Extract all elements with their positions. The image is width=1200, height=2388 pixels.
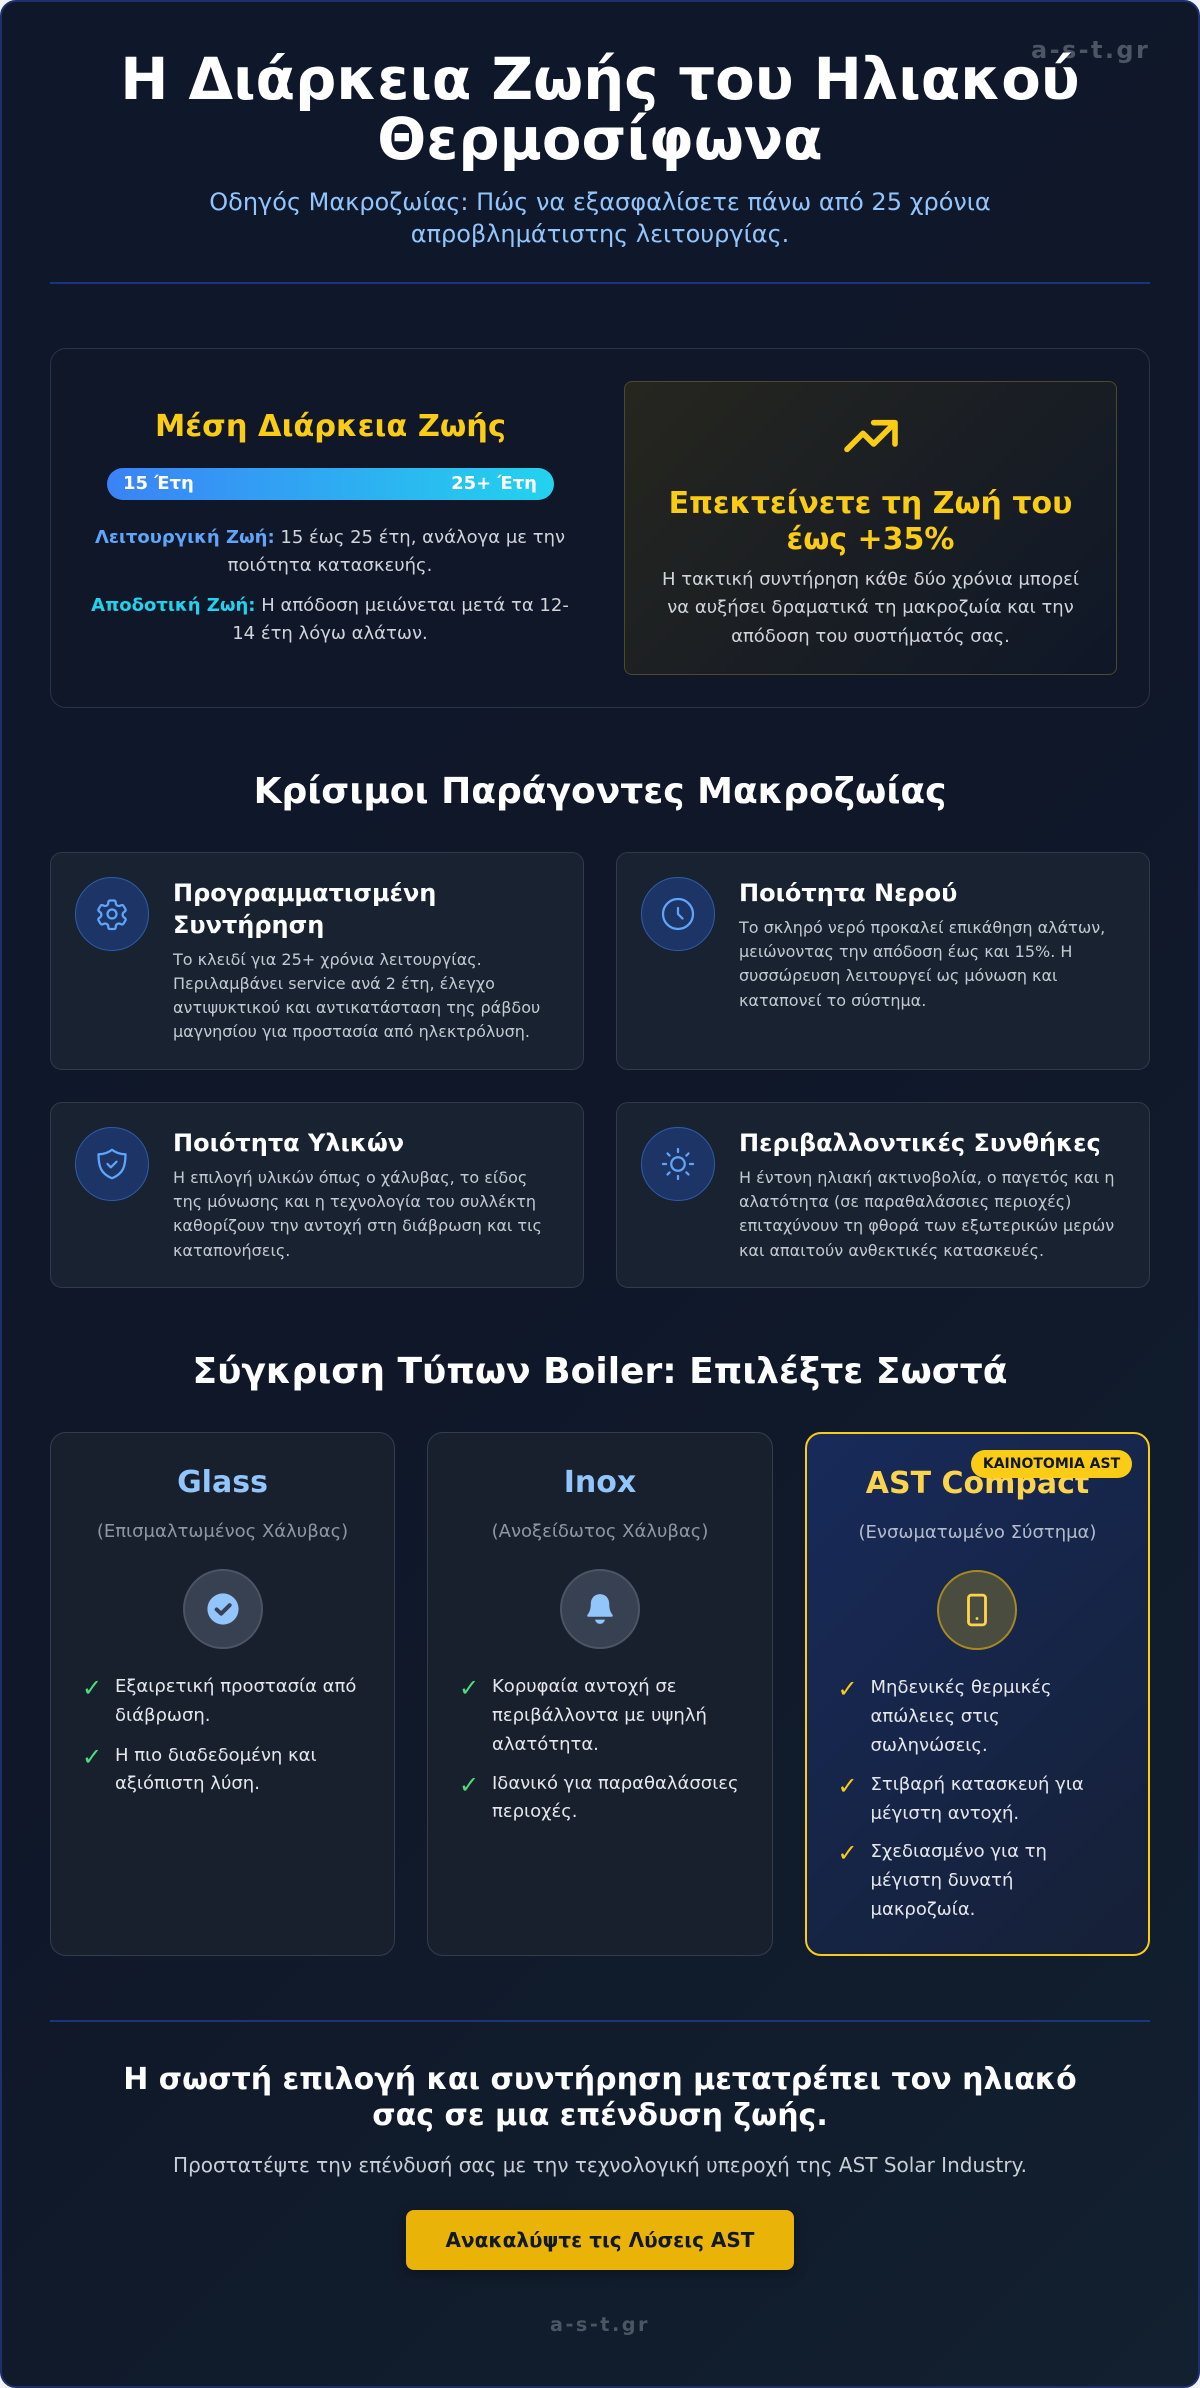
heading: boiler comparison: Σύγκριση Τύπων Boiler: Επιλέξτε Σωστά (192, 1351, 1008, 1392)
panel: AST Compact: ✓ (838, 1772, 858, 1800)
heading: Περιβαλλοντικές Συνθήκες (739, 1129, 1101, 1157)
icon: clock (641, 877, 715, 951)
heading: critical factors: Κρίσιμοι Παράγοντες Μακροζωίας (254, 771, 946, 812)
text: regular maintenance: Η τακτική συντήρηση κάθε δύο χρόνια μπορεί (662, 568, 1079, 590)
panel: water quality (616, 852, 1150, 1070)
text: efficient life: 14 έτη λόγω αλάτων. (232, 623, 428, 644)
description: αντιψυκτικού και αντικατάσταση της ράβδου (173, 998, 540, 1017)
text: operational life: ποιότητα κατασκευής. (228, 555, 432, 576)
heading: Προγραμματισμένη (173, 879, 436, 907)
list item: αλατότητα. (492, 1734, 599, 1755)
text: regular maintenance: να αυξήσει δραματικά τη μακροζωία και την (667, 597, 1074, 618)
description: Η έντονη ηλιακή ακτινοβολία, ο παγετός και η (739, 1168, 1115, 1187)
badge: AST innovation (971, 1450, 1132, 1478)
description: μαγνησίου για προστασία από ηλεκτρόλυση. (173, 1022, 530, 1041)
text: regular maintenance: απόδοση του συστήματός σας. (731, 626, 1010, 647)
title: Θερμοσίφωνα (377, 106, 823, 173)
material: (Ενσωματωμένο Σύστημα) (859, 1522, 1096, 1542)
icon: shield check (75, 1127, 149, 1201)
list item: απώλειες στις (870, 1706, 1000, 1727)
progress bar: 15 to 25+ years: 15 Έτη (123, 473, 194, 494)
title: Η Διάρκεια Ζωής του Ηλιακού (120, 46, 1080, 113)
callout: extend life (624, 381, 1117, 675)
description: επιταχύνουν τη φθορά των εξωτερικών μερών (739, 1216, 1114, 1235)
icon: gear (75, 877, 149, 951)
description: Περιλαμβάνει service ανά 2 έτη, έλεγχο (173, 974, 495, 993)
list item: μέγιστη δυνατή (870, 1870, 1013, 1891)
badge: AST innovation: ΚΑΙΝΟΤΟΜΙΑ AST (983, 1456, 1120, 1472)
watermark: footer: a-s-t.gr (550, 2313, 650, 2336)
text: operational life: Λειτουργική Ζωή: 15 έως 25 έτη, ανάλογα με την (95, 526, 565, 548)
title (120, 46, 1080, 173)
list item: Κορυφαία αντοχή σε (492, 1676, 677, 1697)
description (738, 918, 1105, 1010)
progress bar: 15 to 25+ years (107, 468, 554, 500)
text: regular maintenance (662, 568, 1079, 647)
description: αλατότητα (σε παραθαλάσσιες περιοχές) (739, 1192, 1071, 1211)
heading: AST Compact (866, 1466, 1089, 1501)
panel: Inox (427, 1432, 773, 1956)
panel: Glass: ✓ (82, 1743, 102, 1771)
description: της μόνωσης και η τεχνολογία του συλλέκτη (173, 1192, 536, 1211)
description: και απαιτούν ανθεκτικές κατασκευές. (739, 1241, 1044, 1260)
list item: Εξαιρετική προστασία από (115, 1676, 356, 1697)
watermark: top right: a-s-t.gr (1031, 36, 1150, 64)
list item: περιβάλλοντα με υψηλή (492, 1705, 707, 1726)
text: operational life (95, 526, 565, 576)
text: efficient life (91, 594, 569, 644)
heading (173, 879, 436, 939)
icon: trending up arrow (844, 420, 898, 452)
panel: AST Compact: ✓ (838, 1675, 858, 1703)
material: (Ανοξείδωτος Χάλυβας) (492, 1520, 708, 1542)
panel: average lifespan (50, 348, 1150, 708)
description (739, 1168, 1115, 1260)
subtitle: Οδηγός Μακροζωίας: Πώς να εξασφαλίσετε πάνω από 25 χρόνια (209, 188, 991, 216)
heading: extend life up to 35 percent: έως +35% (787, 522, 954, 557)
subtitle: απροβλημάτιστης λειτουργίας. (411, 220, 789, 248)
closing statement: Η σωστή επιλογή και συντήρηση μετατρέπει τον ηλιακό (123, 2062, 1077, 2097)
list item: Σχεδιασμένο για τη (870, 1841, 1047, 1862)
description: καθορίζουν την αντοχή στη διάβρωση και τις (173, 1216, 542, 1235)
description: καταπονήσεις. (173, 1241, 290, 1260)
button: discover AST solutions (406, 2210, 794, 2270)
list item: μακροζωία. (870, 1899, 975, 1920)
closing statement (123, 2062, 1077, 2133)
list item (838, 1772, 1084, 1824)
list item: Μηδενικές θερμικές (870, 1677, 1052, 1698)
description (172, 950, 540, 1041)
list item: Η πιο διαδεδομένη και (115, 1745, 317, 1766)
closing subtext: Προστατέψτε την επένδυσή σας με την τεχνολογική υπεροχή της AST Solar Industry. (173, 2153, 1027, 2177)
heading: extend life up to 35 percent (669, 486, 1072, 557)
list item: περιοχές. (492, 1801, 578, 1822)
heading: Glass (177, 1465, 268, 1500)
panel: AST Compact (805, 1432, 1150, 1956)
closing statement: σας σε μια επένδυση ζωής. (372, 2098, 828, 2133)
list item: Στιβαρή κατασκευή για (870, 1774, 1084, 1795)
progress bar: 15 to 25+ years: 25+ Έτη (451, 473, 537, 494)
subtitle (209, 188, 991, 248)
list item: μέγιστη αντοχή. (870, 1803, 1019, 1824)
description: Το σκληρό νερό προκαλεί επικάθηση αλάτων, (739, 918, 1105, 937)
heading: Inox (564, 1465, 636, 1500)
list item: Ιδανικό για παραθαλάσσιες (492, 1773, 739, 1794)
list item (838, 1839, 1047, 1920)
panel: material quality (50, 1102, 584, 1288)
list item (82, 1674, 356, 1726)
heading: Ποιότητα Νερού (739, 879, 957, 907)
icon: sun (641, 1127, 715, 1201)
icon: check circle (183, 1569, 263, 1649)
description: καταπονεί το σύστημα. (739, 991, 926, 1010)
heading: Συντήρηση (173, 911, 324, 939)
panel: Inox: ✓ (459, 1771, 479, 1799)
list item: διάβρωση. (115, 1705, 210, 1726)
panel: environmental conditions (616, 1102, 1150, 1288)
list item: αξιόπιστη λύση. (115, 1773, 260, 1794)
icon: device (937, 1570, 1017, 1650)
list item (459, 1674, 707, 1755)
panel: Inox: ✓ (459, 1674, 479, 1702)
description: Η επιλογή υλικών όπως ο χάλυβας, το είδος (173, 1168, 527, 1187)
list item: σωληνώσεις. (870, 1735, 988, 1756)
list item (82, 1743, 317, 1794)
button: discover AST solutions: Ανακαλύψτε τις Λύσεις AST (446, 2228, 754, 2252)
list item (459, 1771, 739, 1822)
material: (Επισμαλτωμένος Χάλυβας) (97, 1520, 348, 1542)
description: συσσώρευση λειτουργεί ως μόνωση και (739, 966, 1057, 985)
description (173, 1168, 542, 1260)
panel: AST Compact: ✓ (838, 1839, 858, 1867)
heading: Ποιότητα Υλικών (173, 1129, 404, 1157)
description: Το κλειδί για 25+ χρόνια λειτουργίας. (173, 950, 482, 969)
panel: Glass (50, 1432, 395, 1956)
panel: scheduled maintenance (50, 852, 584, 1070)
heading: average lifespan: Μέση Διάρκεια Ζωής (155, 409, 506, 444)
list item (838, 1675, 1052, 1756)
description: μειώνοντας την απόδοση έως και 15%. Η (739, 942, 1072, 961)
panel: Glass: ✓ (82, 1674, 102, 1702)
heading: extend life up to 35 percent: Επεκτείνετε τη Ζωή του (669, 486, 1072, 521)
text: efficient life: Αποδοτική Ζωή: Η απόδοση μειώνεται μετά τα 12- (91, 594, 569, 616)
icon: bell (560, 1569, 640, 1649)
